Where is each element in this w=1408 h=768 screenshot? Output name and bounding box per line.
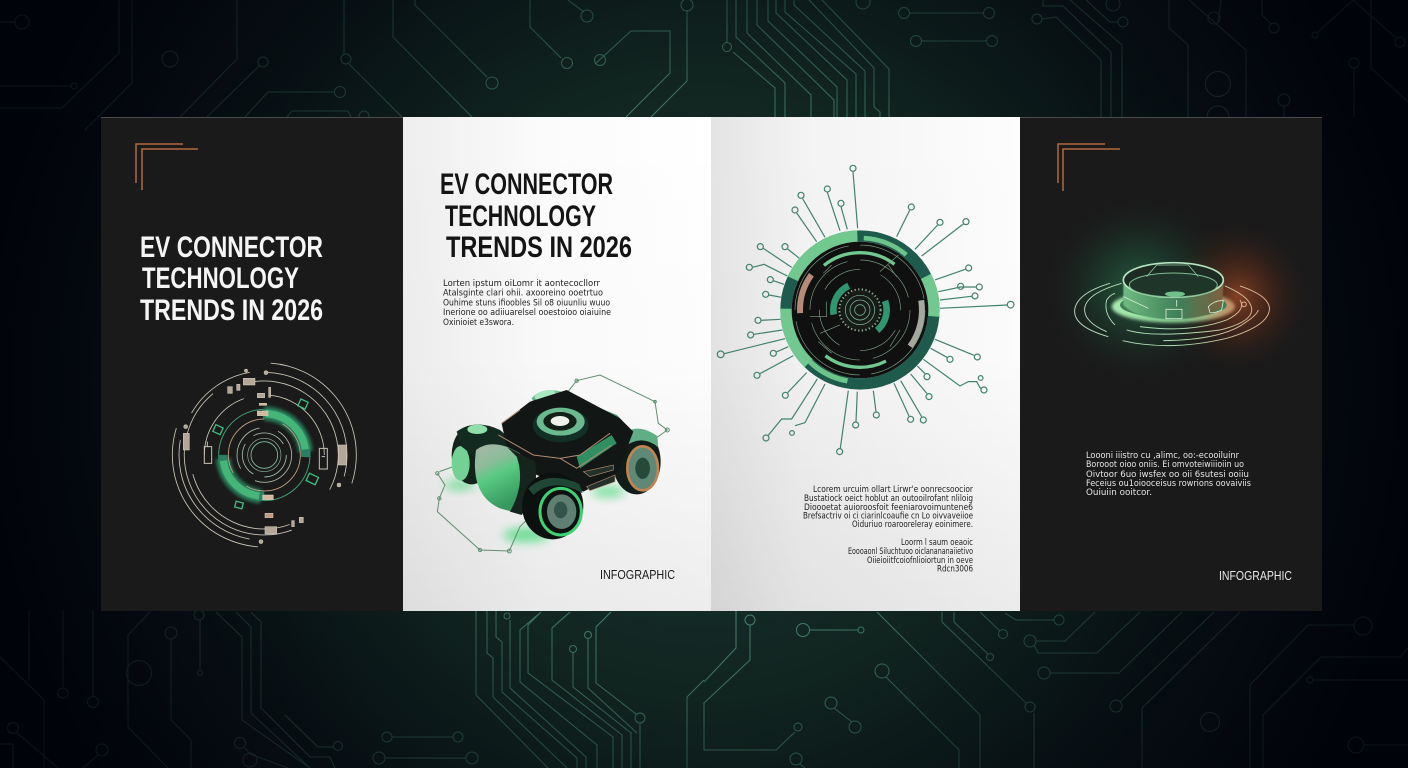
text block: diagram notes: Loorm l saum oeaoic xyxy=(901,537,973,547)
illustration: green connector vehicle xyxy=(436,375,669,553)
charging port ring xyxy=(533,408,589,442)
diagram: radial connector hub xyxy=(717,165,1014,455)
heading: page title xyxy=(440,168,632,264)
heading: cover title: TECHNOLOGY xyxy=(142,262,299,295)
right wheel xyxy=(613,429,661,494)
icon: glowing charging port xyxy=(1040,193,1313,387)
heading: cover title: TRENDS IN 2026 xyxy=(140,294,323,327)
corner bracket xyxy=(136,144,198,190)
label: infographic: INFOGRAPHIC xyxy=(1219,568,1292,583)
text block: diagram notes: Dioooetat auioroosfoit feeniarovoimuntene6 xyxy=(804,502,973,512)
label: infographic: INFOGRAPHIC xyxy=(600,567,675,582)
text block: intro paragraph: Inerione oo adiiuarelsel ooestoioo oiaiuine xyxy=(443,308,611,318)
corner bracket xyxy=(1058,144,1120,191)
connector slots xyxy=(583,465,615,491)
text block: diagram notes: Bustatiock oeict hoblut an outooilrofant nliloig xyxy=(804,493,973,503)
icon: circular connector rings xyxy=(150,340,379,570)
text block: diagram notes: Rdcn3006 xyxy=(937,564,973,574)
text block: intro paragraph xyxy=(443,279,611,328)
hub centre xyxy=(829,279,891,341)
heading: page title: TECHNOLOGY xyxy=(445,200,596,233)
panel: white title page xyxy=(403,117,711,611)
rear left wheel xyxy=(452,426,492,484)
text block: intro paragraph: Ouhime stuns ifioobles Sil o8 oiuunliu wuuo xyxy=(443,298,610,308)
front wheel xyxy=(522,473,583,539)
panel: dark glow page xyxy=(1020,117,1322,611)
panel: dark cover xyxy=(101,117,403,611)
text block: port notes: Ouiuiin ooitcor. xyxy=(1086,487,1152,497)
text block: intro paragraph: Oxinioiet e3swora. xyxy=(443,318,514,328)
text block: diagram notes xyxy=(803,484,973,574)
text block: port notes xyxy=(1086,450,1251,497)
text block: port notes: Loooni iiistro cu ,alimc, oo:-ecooiluinr xyxy=(1086,450,1240,460)
text block: diagram notes: Brefsactriv oi ci ciarinlcoaufie cn Lo oivvaveiioe xyxy=(803,510,973,520)
heading: cover title xyxy=(140,231,323,327)
rear cylinder xyxy=(532,390,624,440)
heading: cover title: EV CONNECTOR xyxy=(140,231,323,264)
text block: port notes: Borooot oioo oniis. Ei omvoteiwiiioiin uo xyxy=(1086,459,1244,469)
text block: intro paragraph: Lorten ipstum oiLomr it aontecocllorr xyxy=(443,279,600,289)
text block: diagram notes: Lcorem urcuim ollart Lirwr'e oonrecsoocior xyxy=(813,484,973,494)
chassis xyxy=(502,390,633,492)
battery drum xyxy=(475,444,522,512)
text block: diagram notes: Oiduriuo roarooreleray eoinimere. xyxy=(852,519,973,529)
panel: white diagram page xyxy=(711,117,1020,611)
black disk xyxy=(792,242,928,378)
text block: diagram notes: Oiieioiitfcoiofnlioiortun in oeve xyxy=(867,555,973,565)
heading: page title: TRENDS IN 2026 xyxy=(446,231,632,264)
outer ring xyxy=(786,236,934,384)
text block: diagram notes: Eoooaonl Siluchtuoo oiclanananaiietivo xyxy=(848,546,973,556)
heading: page title: EV CONNECTOR xyxy=(440,168,613,201)
text block: intro paragraph: Atalsginte clari ohii. axooreino ooetrtuo xyxy=(443,288,603,298)
hub rays xyxy=(717,165,1014,455)
text block: port notes: Oivtoor 6uo iwsfex oo oii 6sutesi ooiiu xyxy=(1086,469,1249,479)
port base xyxy=(1112,291,1235,323)
text block: port notes: Feceius ou1oiooceisus rowrions oovaiviis xyxy=(1086,478,1251,488)
